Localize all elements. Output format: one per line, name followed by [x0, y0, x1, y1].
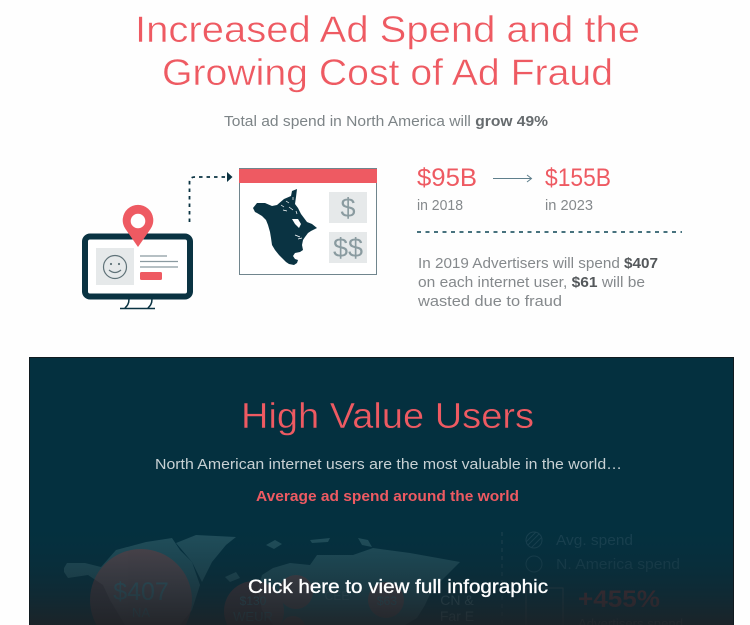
bubble labels: WEUR — [233, 609, 273, 624]
panel: North America browser window — [239, 168, 377, 274]
text block: per-user spend: In 2019 Advertisers will spend $407 — [418, 256, 658, 272]
bubble labels: $130 — [240, 594, 267, 608]
bubble labels: $63 — [377, 594, 397, 608]
arrow: dotted connector — [190, 172, 232, 222]
text block: per-user spend — [417, 256, 658, 310]
stat: 2023 spend: $155B — [545, 164, 611, 192]
text block: per-user spend: wasted due to fraud — [417, 294, 562, 310]
bubble labels: CN & — [440, 592, 474, 608]
bubble labels: $407 — [113, 578, 169, 606]
stat: 2018 spend: $95B — [417, 164, 477, 192]
gradient overlay — [30, 520, 733, 625]
icon: single dollar tile: $ — [340, 193, 356, 223]
callout: +455% — [578, 586, 660, 613]
icon: North America map — [253, 189, 317, 265]
stat: 2023 spend — [545, 164, 611, 214]
dashed legend divider — [501, 532, 503, 625]
call to action: Click here to view full infographic — [248, 577, 548, 598]
world map — [64, 535, 460, 625]
arrow: growth — [493, 175, 532, 182]
legend: N. America spend — [556, 556, 680, 573]
legend — [524, 530, 680, 573]
bubble labels: CEE — [325, 589, 349, 603]
bubble labels — [113, 578, 474, 624]
icon: monitor with location pin — [85, 205, 190, 308]
chart: spend bubbles — [90, 549, 404, 625]
subheading: Average ad spend around the world — [256, 489, 519, 505]
stat: 2018 spend — [417, 164, 477, 214]
stat: 2018 spend: in 2018 — [417, 198, 463, 214]
stat: 2023 spend: in 2023 — [545, 198, 593, 214]
heading: High Value Users — [241, 395, 534, 436]
bubble labels: Far E — [440, 608, 474, 624]
panel: High Value Users — [30, 358, 734, 625]
title — [135, 9, 640, 93]
subtitle: Total ad spend in North America will grow 49% — [224, 114, 548, 130]
icon: double dollar tile: $$ — [333, 233, 363, 263]
bubble labels: NA — [132, 605, 150, 620]
callout — [526, 586, 683, 625]
title: Growing Cost of Ad Fraud — [162, 52, 613, 93]
text block: per-user spend: on each internet user, $61 will be — [418, 275, 645, 291]
legend: Avg. spend — [556, 532, 633, 549]
title: Increased Ad Spend and the — [135, 9, 640, 50]
text block: North American internet users are the most valuable in the world… — [155, 457, 622, 473]
